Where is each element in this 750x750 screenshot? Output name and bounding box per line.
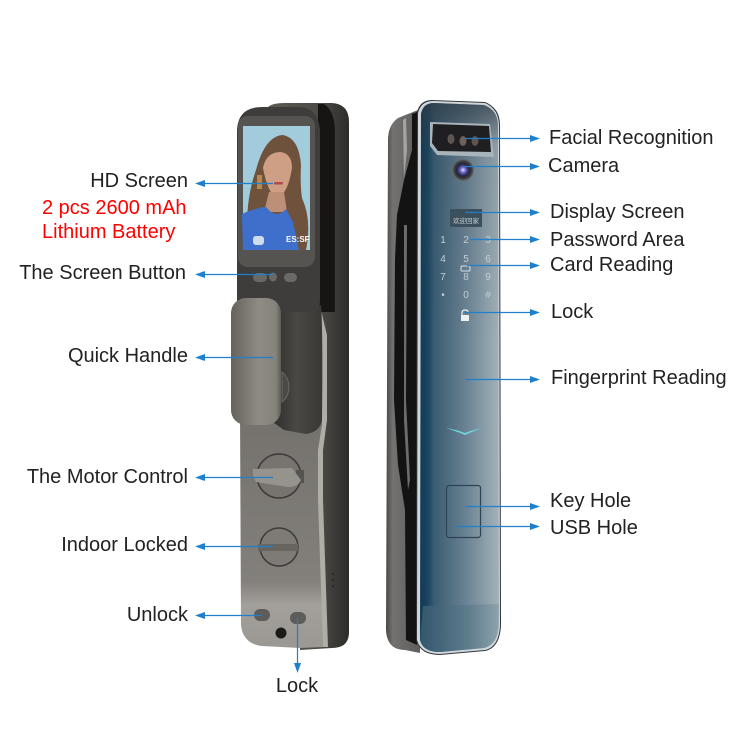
label: USB Hole: USB Hole bbox=[550, 517, 638, 539]
display screen: 欢迎回家 bbox=[453, 216, 480, 225]
display screen bbox=[450, 209, 482, 227]
label: battery bbox=[42, 197, 187, 243]
label: Camera: Camera bbox=[548, 155, 620, 177]
key and USB cover bbox=[446, 486, 480, 538]
handle side bbox=[386, 110, 420, 653]
buttons bbox=[253, 273, 267, 282]
label: Display Screen: Display Screen bbox=[550, 201, 685, 223]
left lock: indoor panel bbox=[231, 103, 349, 650]
motor knob bbox=[253, 454, 304, 498]
keypad: 5 bbox=[463, 254, 469, 265]
label: Password Area: Password Area bbox=[550, 229, 685, 251]
label: The Screen Button: The Screen Button bbox=[19, 262, 186, 284]
label: battery: 2 pcs 2600 mAh bbox=[42, 197, 187, 219]
quick handle bbox=[231, 298, 281, 425]
keypad: 4 bbox=[440, 254, 446, 265]
label: The Motor Control: The Motor Control bbox=[27, 466, 188, 488]
arrows bbox=[205, 138, 530, 663]
screen bezel bbox=[237, 107, 320, 312]
camera bbox=[452, 159, 474, 181]
keypad: 7 bbox=[440, 272, 446, 283]
label: Quick Handle: Quick Handle bbox=[68, 345, 188, 367]
label: battery: Lithium Battery bbox=[42, 221, 175, 243]
face bbox=[416, 100, 501, 655]
icon: padlock bbox=[461, 310, 469, 321]
keypad: 8 bbox=[463, 272, 469, 283]
clock readout: ES:SF bbox=[286, 235, 310, 244]
label: HD Screen: HD Screen bbox=[90, 170, 188, 192]
label: Facial Recognition: Facial Recognition bbox=[549, 127, 714, 149]
keypad: 6 bbox=[485, 254, 491, 265]
back body bbox=[268, 103, 349, 650]
keypad: 0 bbox=[463, 290, 469, 301]
indoor lock knob bbox=[258, 528, 300, 566]
keypad bbox=[440, 235, 491, 301]
keypad: 1 bbox=[440, 235, 446, 246]
labels: right bbox=[548, 127, 727, 539]
handle cavity bbox=[270, 305, 322, 434]
icon: screen with portrait bbox=[242, 126, 310, 250]
icon: card reader bbox=[461, 266, 470, 271]
label: Fingerprint Reading: Fingerprint Reading bbox=[551, 367, 727, 389]
label: Indoor Locked: Indoor Locked bbox=[61, 534, 188, 556]
label: Key Hole: Key Hole bbox=[550, 490, 631, 512]
keypad: • bbox=[441, 290, 445, 301]
label: Lock: Lock bbox=[551, 301, 594, 323]
label: Lock: Lock bbox=[276, 675, 319, 697]
lower plate bbox=[240, 410, 324, 648]
keypad: 3 bbox=[485, 235, 491, 246]
keypad: 2 bbox=[463, 235, 469, 246]
labels: left bbox=[19, 170, 319, 697]
indicator chevron bbox=[446, 428, 482, 435]
face recognition window bbox=[430, 122, 494, 157]
label: Unlock: Unlock bbox=[127, 604, 189, 626]
unlock and lock buttons bbox=[254, 609, 306, 624]
right lock: outdoor panel bbox=[386, 100, 501, 655]
keypad: 9 bbox=[485, 272, 491, 283]
keypad: # bbox=[485, 290, 491, 301]
label: Card Reading: Card Reading bbox=[550, 254, 673, 276]
